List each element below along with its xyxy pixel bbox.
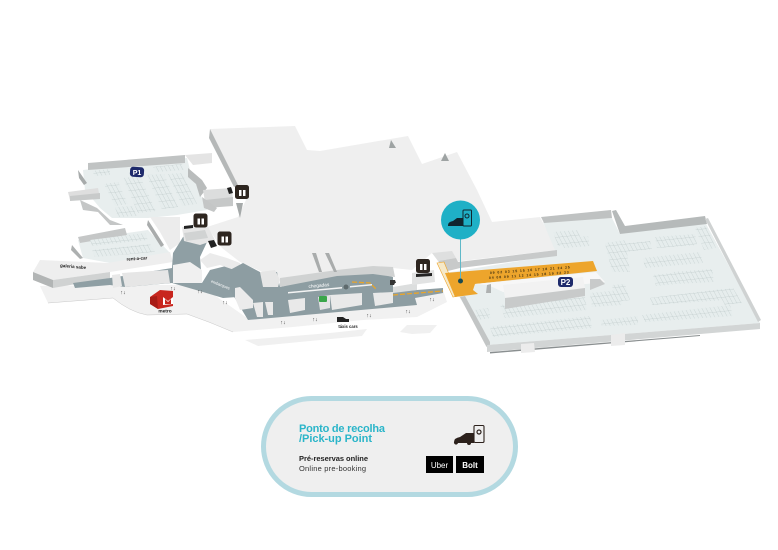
icon: car with phone xyxy=(454,426,484,445)
access arrows: ↑↓ xyxy=(120,290,126,296)
baggage counters xyxy=(184,187,432,277)
access arrows: ↑↓ xyxy=(197,289,203,295)
access arrows: ↑↓ xyxy=(405,309,411,315)
map labels: galeria sabe xyxy=(60,263,87,270)
arrivals hall floor xyxy=(230,253,443,320)
button: Bolt xyxy=(456,456,484,473)
label: P2: P2 xyxy=(561,278,571,287)
icon: info marker xyxy=(344,284,348,290)
parking bay numbers: 09 02 03 15 15 16 17 18 21 24 25 xyxy=(490,265,570,275)
label: metro: metro xyxy=(158,308,172,314)
access arrows: ↑↓ xyxy=(312,317,318,323)
icon: luggage 1 xyxy=(235,185,249,199)
map labels: táxis cars xyxy=(338,324,358,329)
dark floor: west hall xyxy=(73,228,240,298)
icon: luggage 4 xyxy=(416,259,430,273)
label: P1 xyxy=(130,167,144,177)
walkway to pick-up point xyxy=(352,282,443,295)
access arrows: ↑↓ xyxy=(280,320,286,326)
building: galeria / rent-a-car xyxy=(33,252,173,288)
pick-up zone orange band: 04 08 09 11 12 14 15 18 19 22 23 xyxy=(489,270,569,280)
car park P1 xyxy=(68,153,233,225)
building blocks west: embarques xyxy=(210,279,231,291)
icon: train xyxy=(319,296,327,302)
button: Uber xyxy=(426,456,453,473)
icon: taxi xyxy=(337,317,349,322)
pick-up pin xyxy=(441,200,480,284)
legend panel xyxy=(264,398,516,494)
access arrows xyxy=(120,286,435,326)
access arrows: ↑↓ xyxy=(170,286,176,292)
icon: luggage 3 xyxy=(218,232,232,246)
pavement islands xyxy=(245,325,437,346)
icon: metro xyxy=(150,290,173,314)
label: chegadas: chegadas xyxy=(308,282,330,290)
label: P1: P1 xyxy=(133,170,141,177)
access arrows: ↑↓ xyxy=(366,313,372,319)
access arrows: ↑↓ xyxy=(429,297,435,303)
button: Bolt: Bolt xyxy=(462,461,478,470)
car park rent-a-car block xyxy=(71,217,180,263)
pavement xyxy=(40,285,447,332)
access arrows: ↑↓ xyxy=(222,300,228,306)
legend panel: /Pick-up Point xyxy=(299,433,372,445)
button: Uber: Uber xyxy=(431,461,449,470)
icon: luggage 2 xyxy=(194,214,208,228)
terminal roof xyxy=(207,126,557,280)
legend heading: Ponto de recolha xyxy=(299,423,386,435)
legend panel: Online pre-booking xyxy=(299,464,366,473)
icon: car rental xyxy=(390,280,396,285)
map labels: rent-a-car xyxy=(126,255,148,262)
car park P2 xyxy=(445,210,761,354)
wall beside pick-up xyxy=(412,250,557,285)
central blocks P2 xyxy=(475,272,605,309)
building blocks west xyxy=(112,225,240,291)
legend text: Pré-reservas online xyxy=(299,454,368,463)
pick-up zone orange band xyxy=(437,261,597,297)
map labels xyxy=(60,255,358,329)
